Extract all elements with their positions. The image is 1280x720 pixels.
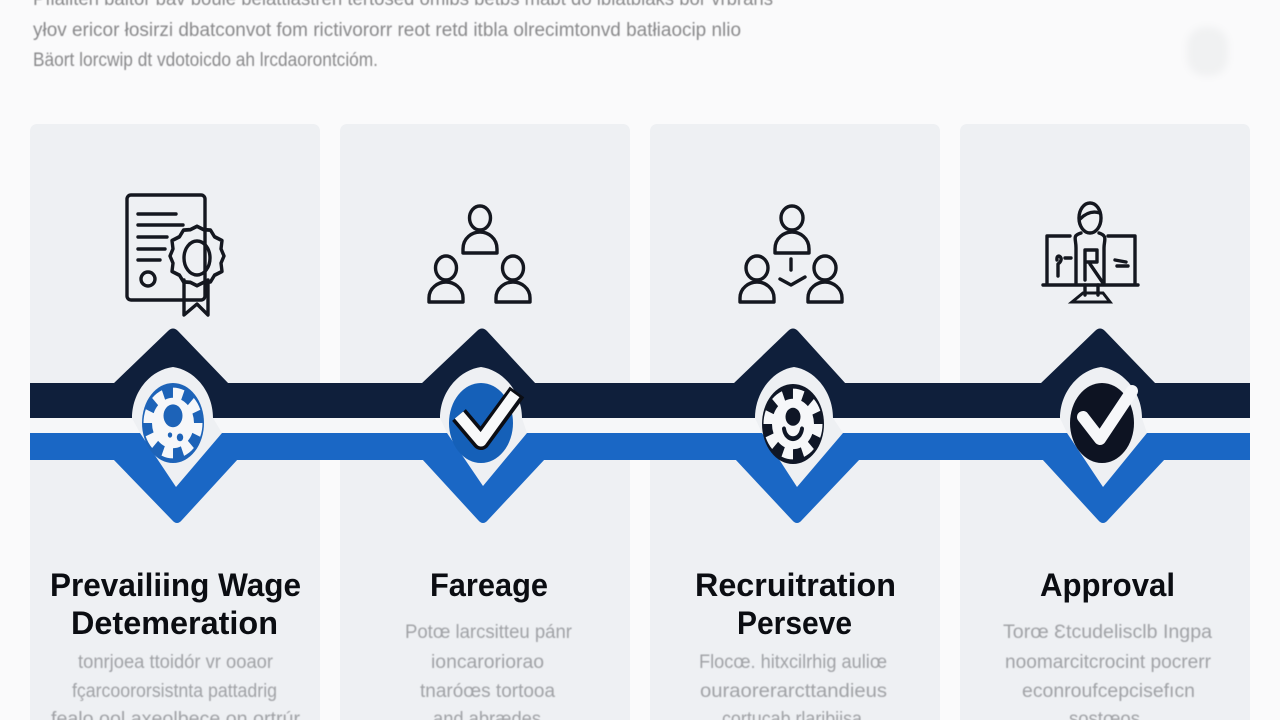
timeline marker 1 xyxy=(113,328,238,523)
icon: person at monitors xyxy=(1043,203,1138,302)
heading: Fareage xyxy=(430,567,548,603)
heading: Prevailiing Wage xyxy=(50,567,301,603)
heading: Detemeration xyxy=(71,605,278,641)
panel: step 2 fareage xyxy=(405,206,573,720)
description: tonrjoea ttoidór vr ooaor xyxy=(78,652,274,673)
description: Potœ larcsitteu pánr xyxy=(405,622,573,643)
description: Flocœ. hitxcilrhig auliœ xyxy=(699,652,887,673)
description: Torœ Ɛtcudelisclb Ingpa xyxy=(1003,622,1212,643)
icon: certificate with seal xyxy=(127,195,224,315)
panel backgrounds xyxy=(30,124,1250,720)
panel: step 1 prevailing wage xyxy=(50,195,301,720)
description xyxy=(405,622,573,720)
panel: step 4 approval xyxy=(1003,203,1212,720)
panel: step 3 recruitment xyxy=(695,206,896,720)
description: fçarcoororsistnta pattadrig xyxy=(72,681,277,702)
heading: Approval xyxy=(1040,567,1175,603)
description: ioncaroriorao xyxy=(431,652,544,673)
icon: people with arrow xyxy=(740,206,842,302)
intro text block xyxy=(33,0,773,71)
timeline marker 3 xyxy=(733,328,860,523)
intro text block: yłov ericor łosirzi dbatconvot fom rictivororr reot retd itbla olrecimtonvd batłiaocip nlio xyxy=(33,20,741,41)
description xyxy=(1003,622,1212,720)
description: econroufcepcisefıcn xyxy=(1022,681,1195,702)
heading: Recruitration xyxy=(695,567,896,603)
description: noomarcitcrocint pocrerr xyxy=(1005,652,1212,673)
description: tnaróœs tortooa xyxy=(420,681,555,702)
timeline marker 4 xyxy=(1040,328,1165,523)
description: ouraorerarcttandieus xyxy=(700,681,887,702)
heading xyxy=(695,567,896,641)
description xyxy=(699,652,887,720)
description xyxy=(51,652,301,720)
heading: Perseve xyxy=(737,605,852,641)
intro text block: Bäort lorcwip dt vdotoicdo ah lrcdaorontcióm. xyxy=(33,50,378,71)
faint badge top right xyxy=(1187,27,1228,76)
timeline bands xyxy=(30,383,1250,460)
heading xyxy=(50,567,301,641)
icon: three people xyxy=(429,206,530,302)
timeline marker 2 xyxy=(421,328,545,523)
